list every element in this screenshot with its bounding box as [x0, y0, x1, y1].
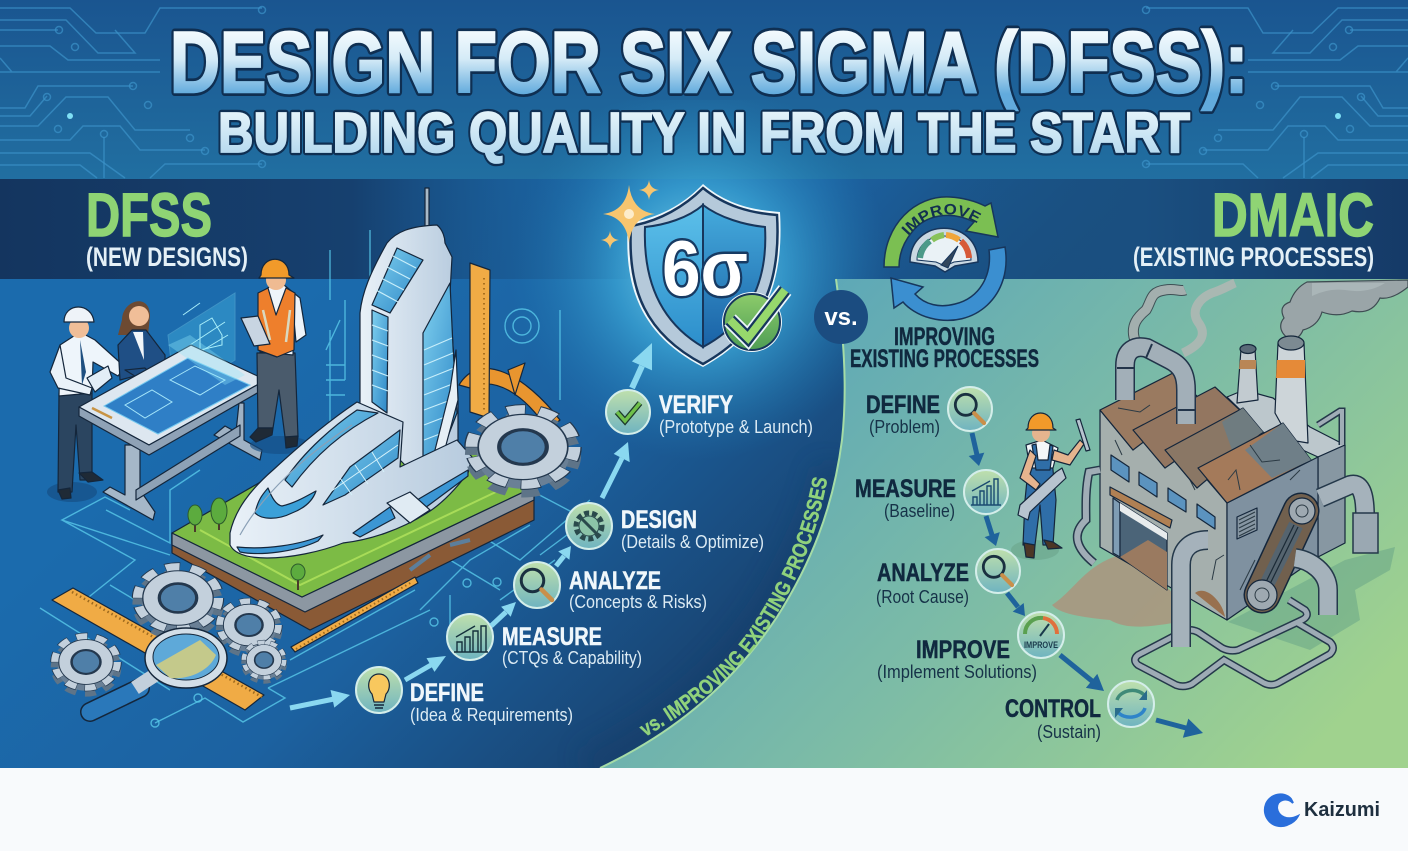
tower shaft — [360, 225, 458, 470]
logo: Kaizumi: Kaizumi — [1304, 799, 1380, 821]
logo mark — [1265, 794, 1298, 826]
illustration: gears, rulers and magnifier — [52, 568, 418, 712]
heading: DMAIC: DMAIC — [1212, 181, 1374, 249]
curved divider line — [600, 279, 845, 768]
step: MEASURE: MEASURE — [502, 623, 602, 651]
icon: gear and wrench — [566, 503, 612, 549]
step: MEASURE — [447, 614, 642, 668]
arrow: analyze to improve — [1007, 593, 1025, 616]
ground block — [172, 445, 534, 630]
sparkles — [601, 180, 659, 249]
arrow: improve to control — [1060, 655, 1104, 691]
step: DMAIC improve: (Implement Solutions) — [877, 662, 1037, 682]
icon: bars — [964, 470, 1008, 514]
engineer in blue suit — [118, 301, 165, 380]
step: VERIFY: VERIFY — [659, 391, 733, 419]
step: VERIFY: (Prototype & Launch) — [659, 417, 813, 437]
title: BUILDING QUALITY IN FROM THE START — [218, 101, 1190, 165]
centre glow behind shield — [480, 100, 920, 460]
smoke — [1133, 280, 1408, 353]
belt — [1247, 498, 1315, 610]
illustration: maintenance worker — [1011, 413, 1090, 560]
vs. badge: vs. — [824, 304, 858, 331]
vs. badge — [814, 290, 868, 344]
factory walls — [1100, 410, 1318, 620]
pipe network — [1077, 470, 1378, 686]
illustration: tower on ground block — [172, 188, 534, 630]
step: DEFINE: (Idea & Requirements) — [410, 705, 573, 725]
icon: gauge — [1018, 612, 1064, 658]
tower spire — [425, 188, 429, 232]
arrow: control onward — [1156, 719, 1203, 738]
check badge — [722, 290, 785, 352]
arrow: design to verify — [602, 442, 630, 498]
arrow: define to measure — [969, 433, 984, 466]
step: DMAIC measure: MEASURE — [855, 475, 956, 503]
step: DMAIC measure: (Baseline) — [884, 501, 955, 521]
heading: improving existing processes: EXISTING PROCESSES — [850, 345, 1039, 373]
icon: improve gauge cycle — [883, 196, 1007, 322]
trees — [188, 448, 496, 590]
step: DMAIC improve — [877, 612, 1064, 682]
panel: DMAIC right background — [600, 279, 1408, 768]
band: left heading strip — [0, 179, 640, 279]
step: DMAIC measure — [855, 470, 1008, 521]
illustration: ruler and orange arrow with big gear — [459, 263, 572, 491]
step: ANALYZE: (Concepts & Risks) — [569, 592, 707, 612]
engineer in white helmet — [47, 307, 125, 502]
heading: DFSS: (NEW DESIGNS) — [86, 242, 248, 272]
arrow: define to measure — [405, 656, 446, 680]
title — [170, 15, 1248, 165]
windows and door — [1110, 455, 1215, 590]
icon: gauge: IMPROVE — [1024, 640, 1058, 650]
arch pipe — [1117, 344, 1195, 424]
title: BUILDING QUALITY IN FROM THE START — [218, 101, 1190, 165]
sawtooth roofs — [1100, 373, 1311, 503]
back platform and wing — [1227, 390, 1345, 557]
step: DMAIC analyze: ANALYZE — [877, 559, 969, 587]
step: DMAIC define — [866, 387, 992, 437]
step: DESIGN: DESIGN — [621, 506, 697, 534]
step: ANALYZE — [514, 562, 707, 612]
icon: magnifier — [976, 549, 1020, 593]
step: VERIFY — [606, 390, 813, 437]
icon: improve gauge cycle: IMPROVE — [901, 204, 982, 235]
step: DMAIC control — [1005, 681, 1154, 742]
arrow: analyze to design — [556, 546, 571, 566]
arrow: measure to analyze — [985, 516, 1000, 546]
engineer in orange vest — [241, 259, 310, 454]
step: DEFINE — [356, 667, 573, 725]
step: DEFINE: DEFINE — [410, 679, 484, 707]
heading: improving existing processes — [850, 323, 1039, 373]
heading: improving existing processes: IMPROVING — [894, 323, 995, 351]
step: DMAIC define: (Problem) — [869, 417, 940, 437]
header banner with circuit pattern — [0, 0, 1408, 180]
step: DMAIC analyze: (Root Cause) — [876, 587, 969, 607]
vent — [1237, 508, 1257, 539]
blueprint circuit lines — [40, 230, 590, 727]
arrow: verify to shield — [632, 343, 652, 388]
arrow: measure to analyze — [491, 602, 516, 626]
band: right heading strip — [880, 179, 1408, 279]
step: DESIGN — [566, 503, 764, 552]
heading: DFSS: DFSS — [86, 181, 212, 249]
panel: DFSS left background — [0, 179, 1408, 768]
magnifier — [90, 628, 227, 712]
dark ring along the curve — [590, 470, 842, 775]
step: DMAIC define: DEFINE — [866, 391, 940, 419]
icon: cycle — [1108, 681, 1154, 727]
icon: bar chart — [447, 614, 493, 660]
drafting table — [79, 335, 266, 520]
step: DMAIC improve: IMPROVE — [916, 636, 1010, 664]
step: DMAIC analyze — [876, 549, 1020, 607]
icon: magnifier — [948, 387, 992, 431]
step: DMAIC control: CONTROL — [1005, 695, 1101, 723]
step: MEASURE: (CTQs & Capability) — [502, 648, 642, 668]
illustration: engineers at drafting table — [47, 259, 310, 520]
dirt patch — [1052, 555, 1190, 627]
heading: DMAIC — [1133, 181, 1374, 272]
icon: check mark — [606, 390, 650, 434]
step: DMAIC control: (Sustain) — [1037, 722, 1101, 742]
arrow: into define — [290, 690, 350, 708]
logo: Kaizumi — [1265, 794, 1380, 826]
shield: six sigma badge — [601, 180, 785, 367]
shield: six sigma badge: 6σ — [662, 224, 748, 312]
icon: light bulb — [356, 667, 402, 713]
step: ANALYZE: ANALYZE — [569, 567, 661, 595]
hologram panel — [168, 293, 235, 395]
icon: magnifier — [514, 562, 560, 608]
chimneys — [1237, 336, 1308, 443]
tower podium — [230, 402, 472, 558]
page background footer — [0, 768, 1408, 851]
ground shadow — [1228, 547, 1395, 650]
step: DESIGN: (Details & Optimize) — [621, 532, 764, 552]
curved label: vs. improving existing processes: vs. IMPROVING EXISTING PROCESSES — [639, 477, 827, 736]
illustration: old factory — [1052, 280, 1408, 686]
